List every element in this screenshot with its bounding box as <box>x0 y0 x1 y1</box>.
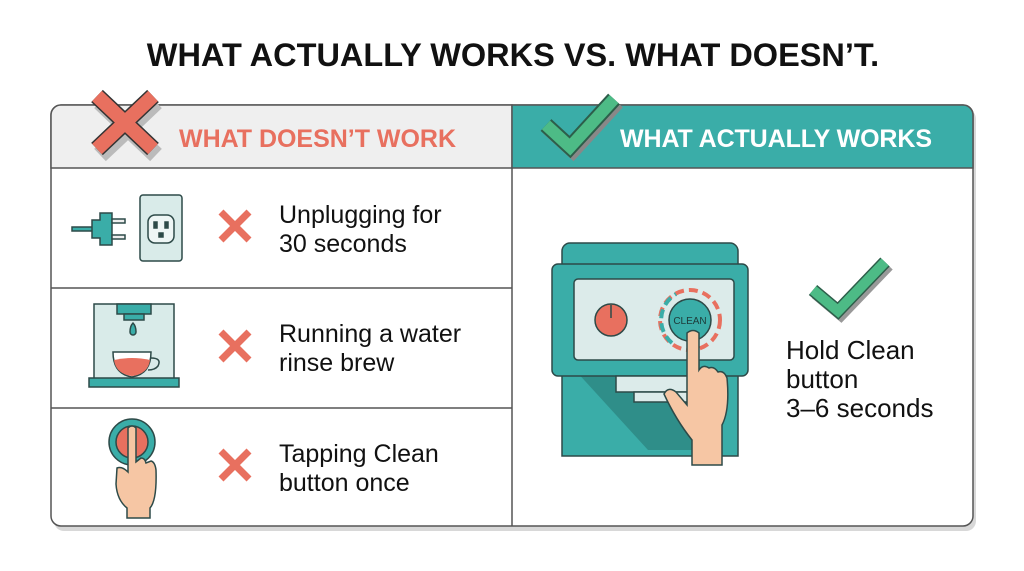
text: rinse brew <box>279 349 395 377</box>
text: button once <box>279 469 410 497</box>
text: hold clean: button <box>786 364 858 394</box>
heading: what actually works: WHAT ACTUALLY WORKS <box>620 125 932 153</box>
icon: big green check <box>546 99 617 150</box>
panel: comparison table <box>51 105 976 531</box>
illustration: machine with clean button <box>552 243 748 465</box>
icon: plug and outlet <box>72 195 182 261</box>
heading: what doesn't work: WHAT DOESN’T WORK <box>179 125 456 153</box>
icon: button with finger <box>109 419 156 518</box>
title: WHAT ACTUALLY WORKS VS. WHAT DOESN’T. <box>147 37 879 73</box>
icon: small x <box>221 212 249 240</box>
text: hold clean: 3–6 seconds <box>786 393 933 423</box>
text: Unplugging for <box>279 201 442 229</box>
row 2: water rinse <box>89 304 461 387</box>
icon: green check <box>813 262 888 314</box>
text: Running a water <box>279 320 461 348</box>
row 3: tapping <box>109 419 439 518</box>
row 1: unplugging <box>72 195 442 261</box>
icon: big red X <box>97 96 156 155</box>
icon: small x <box>221 332 249 360</box>
illustration: machine with clean button: CLEAN <box>673 316 707 327</box>
icon: small x <box>221 451 249 479</box>
text: Tapping Clean <box>279 440 439 468</box>
text: 30 seconds <box>279 230 407 258</box>
text: hold clean: Hold Clean <box>786 335 915 365</box>
icon: coffee maker <box>89 304 179 387</box>
